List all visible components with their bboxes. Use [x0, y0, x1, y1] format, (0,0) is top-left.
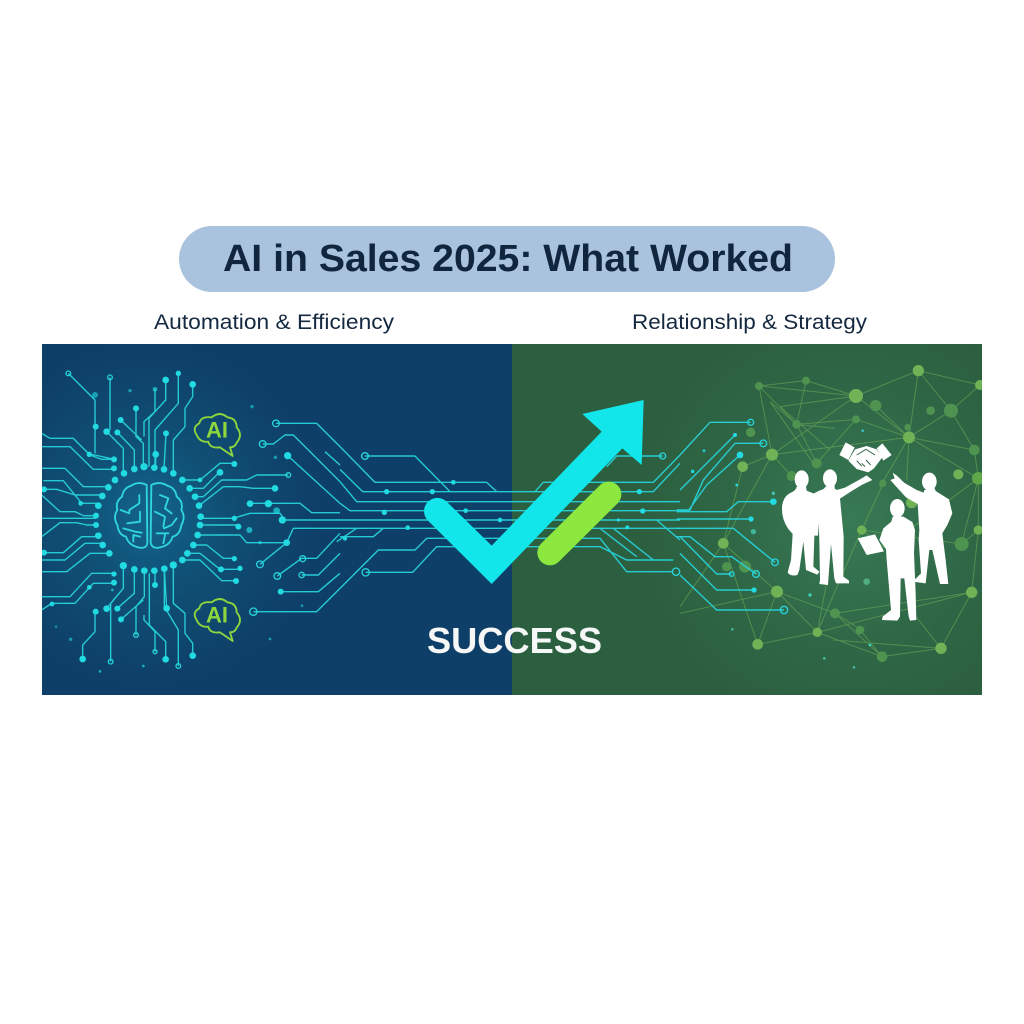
person with clipboard: [858, 499, 916, 621]
icon: AI speech bubble top: [195, 414, 240, 456]
panel: automation and efficiency: [42, 344, 512, 695]
icon: AI speech bubble bottom: AI: [206, 603, 228, 628]
circuit traces: right side: [677, 419, 788, 614]
icon: AI speech bubble top: AI: [206, 418, 228, 443]
green accent bar: [550, 494, 609, 553]
icon: success check mark with growth arrow: [424, 400, 644, 584]
panel: relationship and strategy: [512, 344, 982, 695]
person left: [782, 470, 819, 575]
left subtitle: Automation & Efficiency: [154, 310, 394, 334]
icon: handshake: [839, 442, 892, 472]
icon: AI speech bubble bottom: [195, 599, 240, 641]
person pointing left: [890, 473, 952, 584]
network graph: [680, 365, 985, 669]
person pointing right: [811, 469, 872, 585]
trace nodes: [41, 371, 306, 673]
icon: brain: [115, 483, 184, 548]
radial traces: [42, 373, 340, 666]
title pill: [179, 226, 835, 292]
people silhouettes: [782, 442, 952, 621]
brain ring nodes: [93, 463, 204, 574]
title pill: AI in Sales 2025: What Worked: [223, 238, 793, 280]
success label: SUCCESS: [427, 620, 602, 661]
right subtitle: Relationship & Strategy: [632, 310, 867, 334]
circuit traces: left brain board: [41, 371, 340, 673]
circuit traces: centre bus: [337, 447, 680, 588]
